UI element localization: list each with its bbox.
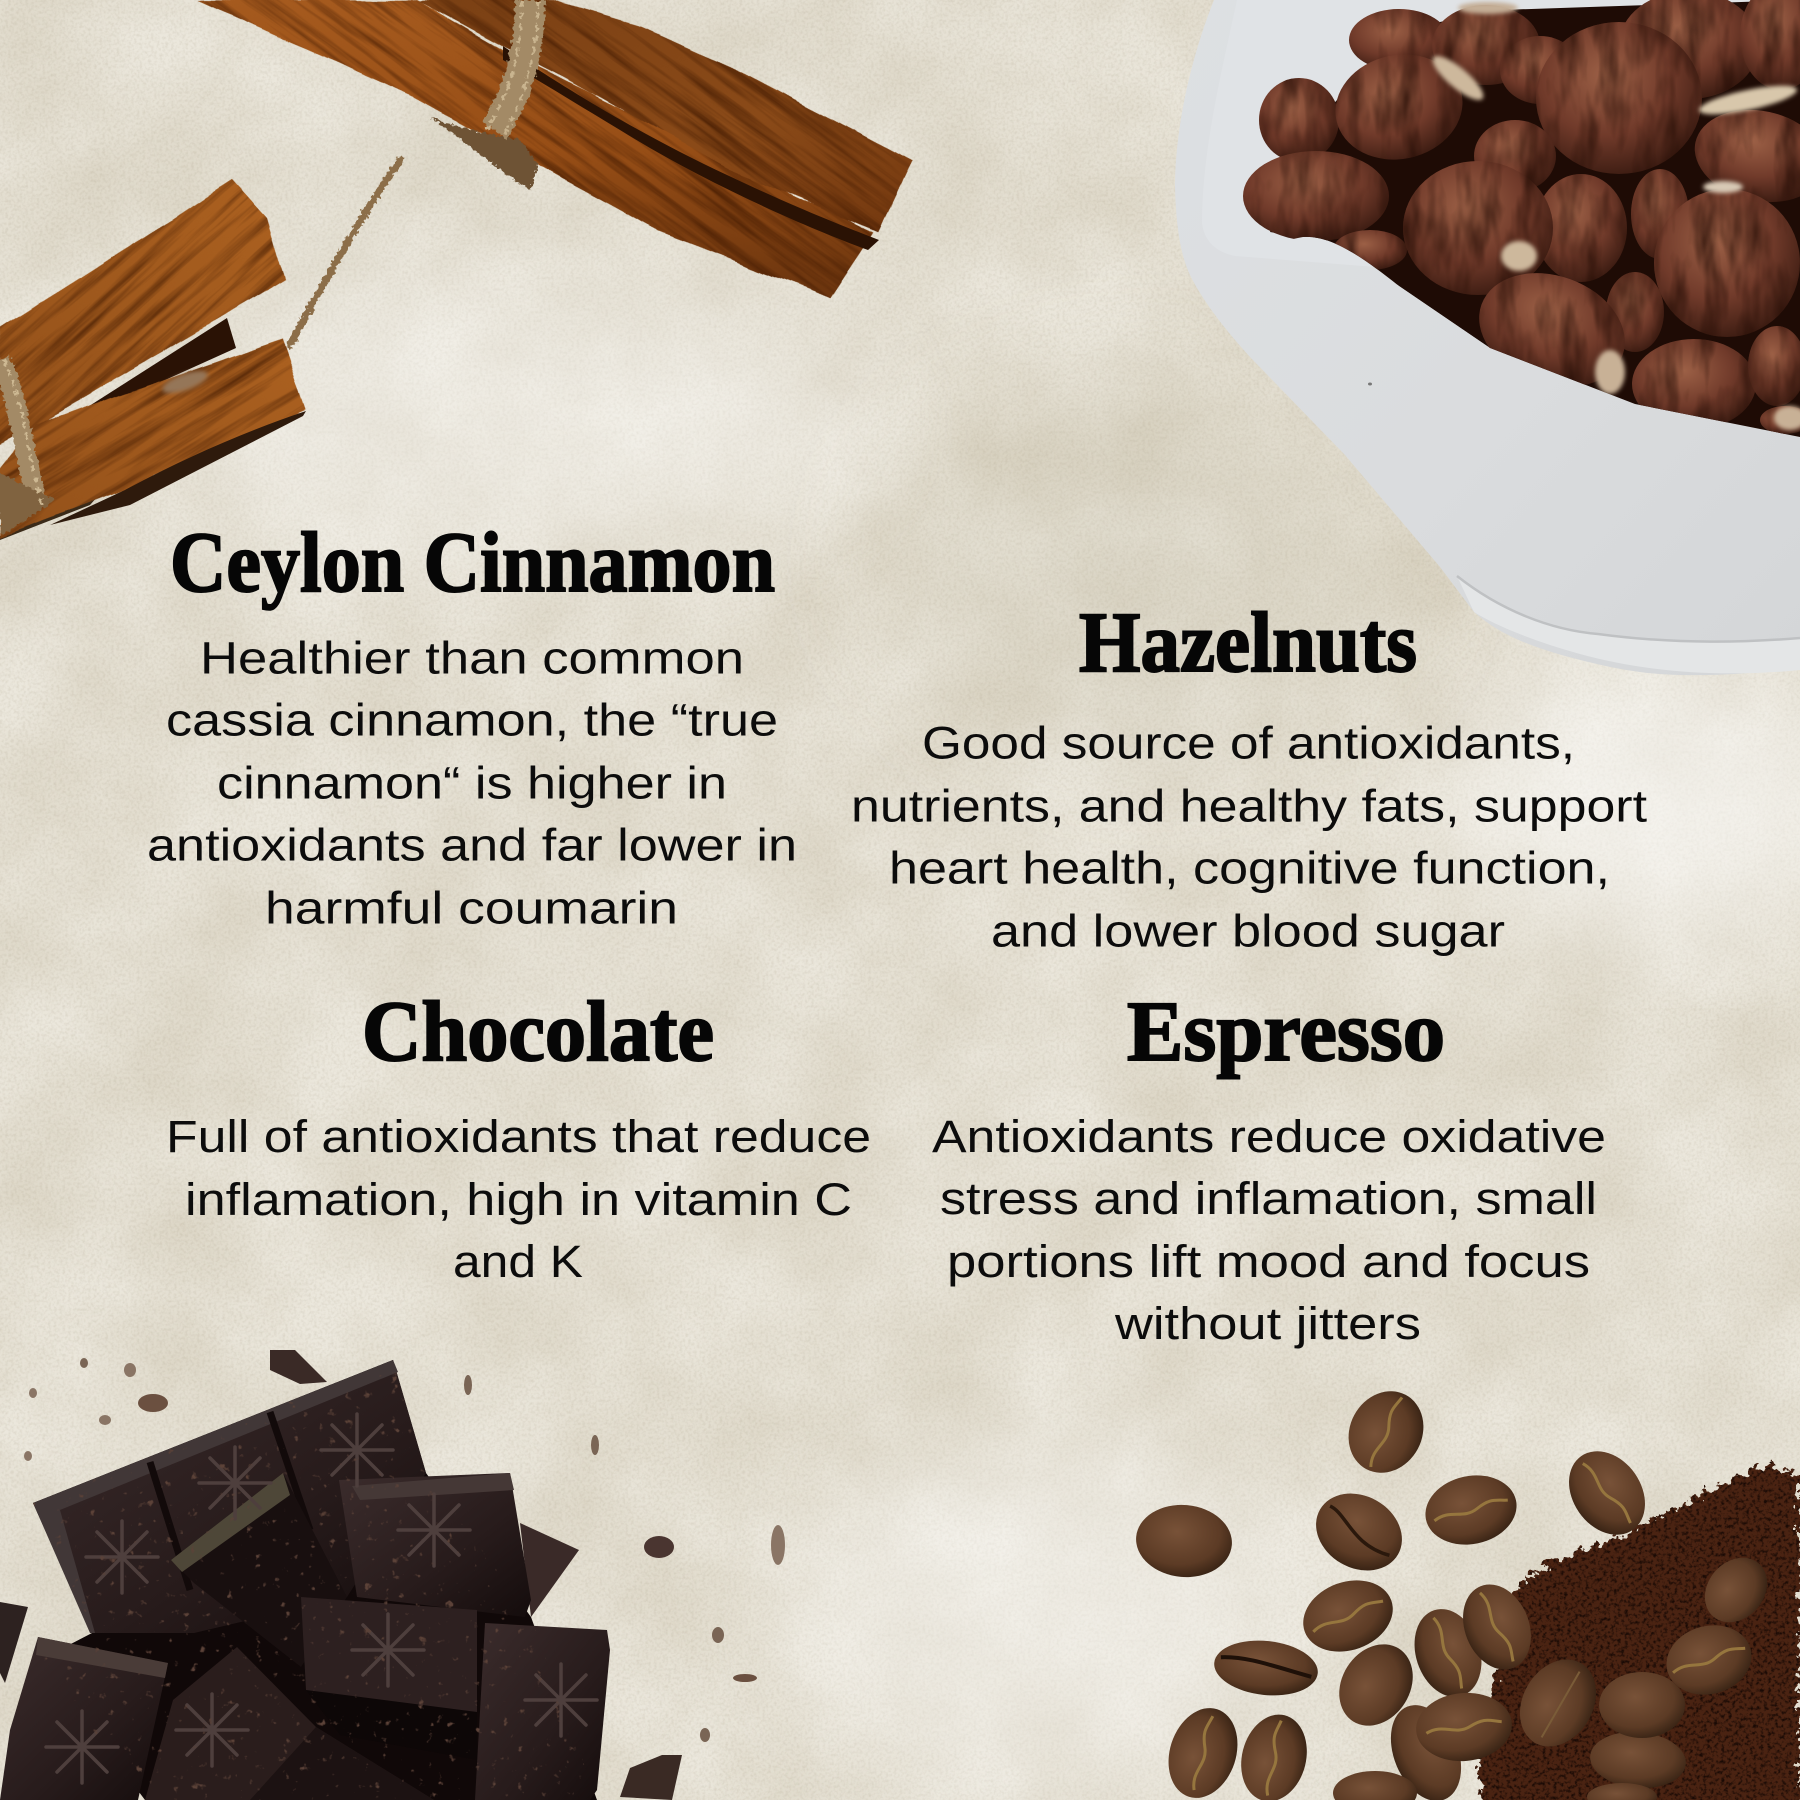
- string: wick: [290, 160, 400, 345]
- star embossing: [46, 1414, 597, 1783]
- text: Hazelnuts description: and lower blood sugar: [991, 906, 1505, 956]
- heading: Espresso: Espresso: [1127, 983, 1445, 1079]
- text: Espresso description: stress and inflamation, small: [940, 1173, 1597, 1224]
- image: coffee grounds and beans: [1133, 1378, 1800, 1800]
- text: Chocolate description: Full of antioxidants that reduce: [166, 1111, 871, 1162]
- image: upper cinnamon sticks: [198, 0, 914, 298]
- image: lower cinnamon sticks with string: [0, 156, 404, 540]
- section: Chocolate: [166, 983, 871, 1287]
- coffee grounds: [1477, 1465, 1800, 1800]
- heading: Ceylon Cinnamon: Ceylon Cinnamon: [170, 514, 775, 610]
- chocolate shards and crumbs: [0, 1350, 785, 1800]
- twine: upper knot: [430, 0, 538, 190]
- heading: Chocolate: Chocolate: [362, 983, 714, 1079]
- chocolate crumb speckle: [33, 1360, 597, 1800]
- section: Hazelnuts: [851, 594, 1648, 956]
- text: Hazelnuts description: nutrients, and healthy fats, support: [851, 780, 1648, 832]
- text: Espresso description: [932, 1111, 1606, 1349]
- text: Ceylon Cinnamon description: cinnamon“ is higher in: [217, 758, 727, 808]
- text: Chocolate description: [166, 1111, 871, 1287]
- coffee beans: [1133, 1378, 1780, 1800]
- text: Ceylon Cinnamon description: Healthier than common: [200, 632, 744, 684]
- text: Ceylon Cinnamon description: cassia cinnamon, the “true: [166, 694, 778, 746]
- hazelnuts: [1243, 0, 1800, 440]
- text: Espresso description: Antioxidants reduce oxidative: [932, 1111, 1606, 1162]
- text: Chocolate description: and K: [453, 1236, 583, 1287]
- text: Ceylon Cinnamon description: [147, 632, 797, 934]
- text: Espresso description: portions lift mood and focus: [947, 1236, 1590, 1287]
- section: Espresso: [932, 983, 1606, 1349]
- text: Espresso description: without jitters: [1114, 1298, 1421, 1349]
- heading: Hazelnuts: Hazelnuts: [1079, 594, 1417, 690]
- text: Hazelnuts description: Good source of antioxidants,: [922, 718, 1575, 768]
- image: dark chocolate pieces: [0, 1350, 785, 1800]
- text: Ceylon Cinnamon description: antioxidants and far lower in: [147, 820, 797, 870]
- section: Ceylon Cinnamon: [147, 514, 797, 934]
- text: Chocolate description: inflamation, high in vitamin C: [185, 1174, 852, 1225]
- text: Ceylon Cinnamon description: harmful coumarin: [265, 882, 678, 934]
- image: white bowl of hazelnuts: [1175, 0, 1800, 675]
- text: Hazelnuts description: [851, 718, 1648, 956]
- twine: lower knot: [0, 360, 55, 535]
- text: Hazelnuts description: heart health, cognitive function,: [889, 842, 1610, 894]
